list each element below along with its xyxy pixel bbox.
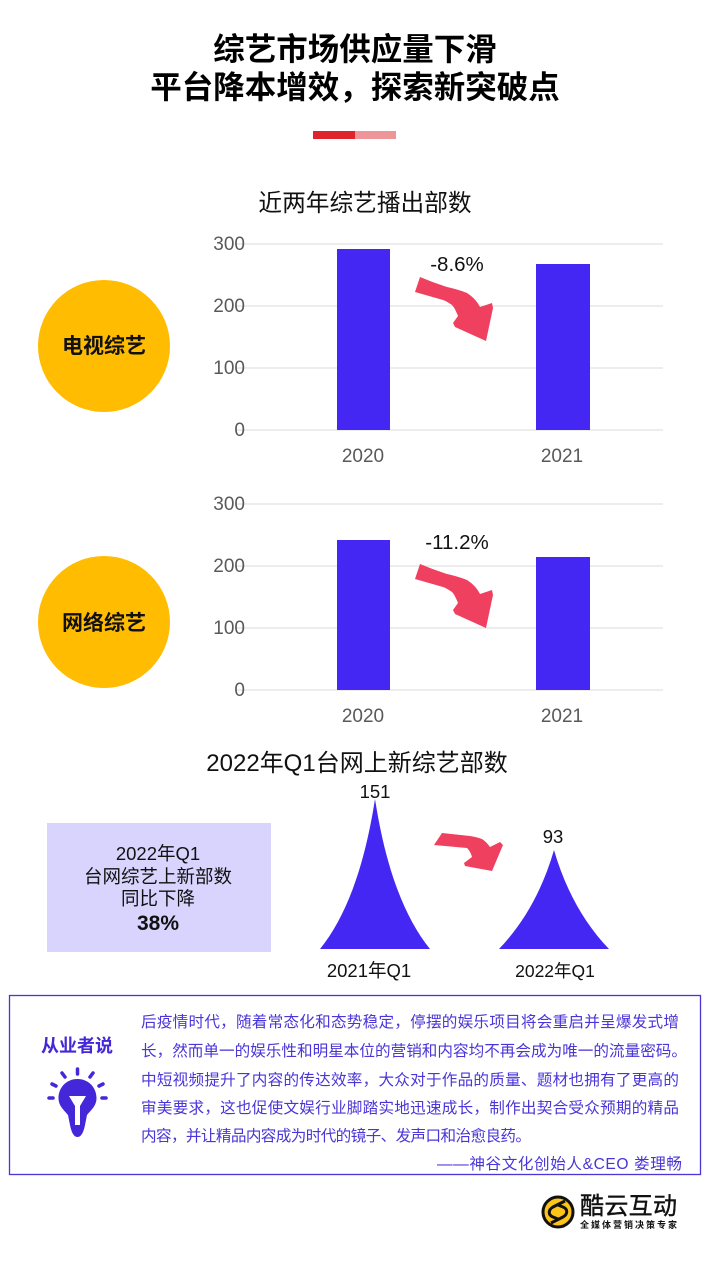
bar chart: 网络综艺 — [213, 494, 663, 727]
circle label: 电视综艺 — [38, 280, 170, 412]
title: 综艺市场供应量下滑 — [213, 31, 497, 67]
pictogram chart: 2021 vs 2022 Q1: 151 — [360, 781, 390, 802]
circle label: 电视综艺: 电视综艺 — [62, 335, 146, 358]
heading: 2022 Q1: 2022年Q1台网上新综艺部数 — [206, 750, 508, 777]
bar chart: 电视综艺 — [213, 234, 663, 467]
callout: 38% decline: 台网综艺上新部数 — [84, 866, 232, 887]
title — [150, 31, 560, 105]
quote text: ——神谷文化创始人&CEO 娄理畅 — [437, 1155, 682, 1173]
quote text: 审美要求，这也促使文娱行业脚踏实地迅速成长，制作出契合受众预期的精品 — [141, 1099, 679, 1117]
quote text — [141, 1012, 687, 1173]
change label -11.2%: -11.2% — [425, 531, 489, 554]
circle label: 网络综艺 — [38, 556, 170, 688]
arrow: decline — [434, 833, 503, 871]
quote text: 长，然而单一的娱乐性和明星本位的营销和内容均不再会成为唯一的流量密码。 — [141, 1042, 687, 1060]
arrow: decline — [415, 277, 493, 341]
bar chart: 网络综艺: 2020 — [342, 706, 384, 727]
pictogram chart: 2021 vs 2022 Q1: 2022年Q1 — [515, 961, 595, 981]
callout: 38% decline: 同比下降 — [121, 888, 195, 909]
bar chart: 网络综艺: 200 — [213, 556, 245, 577]
logo: 酷云互动 — [543, 1193, 677, 1230]
bar chart: 电视综艺: 100 — [213, 358, 245, 379]
change label -8.6%: -8.6% — [430, 253, 484, 276]
logo: 酷云互动: 全媒体营销决策专家 — [580, 1219, 677, 1230]
bar chart: 网络综艺: 300 — [213, 494, 245, 515]
quote text: 内容，并让精品内容成为时代的镜子、发声口和治愈良药。 — [141, 1126, 531, 1145]
title accent bar — [313, 131, 396, 139]
title: 平台降本增效，探索新突破点 — [150, 69, 560, 105]
quote text: 后疫情时代，随着常态化和态势稳定，停摆的娱乐项目将会重启并呈爆发式增 — [141, 1012, 679, 1031]
bar chart: 电视综艺: 300 — [213, 234, 245, 255]
pictogram chart: 2021 vs 2022 Q1: 93 — [543, 826, 563, 847]
bar chart: 电视综艺: 2020 — [342, 446, 384, 467]
panel: quote — [10, 996, 700, 1174]
callout: 38% decline: 38% — [137, 912, 179, 935]
callout: 38% decline: 2022年Q1 — [116, 843, 200, 864]
arrow: decline — [415, 564, 493, 628]
quote text: 中短视频提升了内容的传达效率，大众对于作品的质量、题材也拥有了更高的 — [141, 1071, 679, 1089]
bar chart: 网络综艺: 0 — [234, 680, 245, 701]
bar chart: 电视综艺: 2021 — [541, 446, 583, 467]
bar chart: 电视综艺: 0 — [234, 420, 245, 441]
icon: light bulb — [49, 1069, 106, 1137]
bar chart: 网络综艺: 100 — [213, 618, 245, 639]
logo: 酷云互动: 酷云互动 — [580, 1193, 677, 1220]
pictogram chart: 2021 vs 2022 Q1 — [320, 781, 609, 981]
pictogram chart: 2021 vs 2022 Q1: 2021年Q1 — [327, 960, 411, 981]
callout: 38% decline — [47, 823, 271, 952]
quote label: 从业者说 — [41, 1036, 113, 1056]
bar chart: 电视综艺: 200 — [213, 296, 245, 317]
circle label: 网络综艺: 网络综艺 — [62, 611, 146, 635]
heading: chart title: 近两年综艺播出部数 — [258, 190, 472, 217]
bar chart: 网络综艺: 2021 — [541, 706, 583, 727]
